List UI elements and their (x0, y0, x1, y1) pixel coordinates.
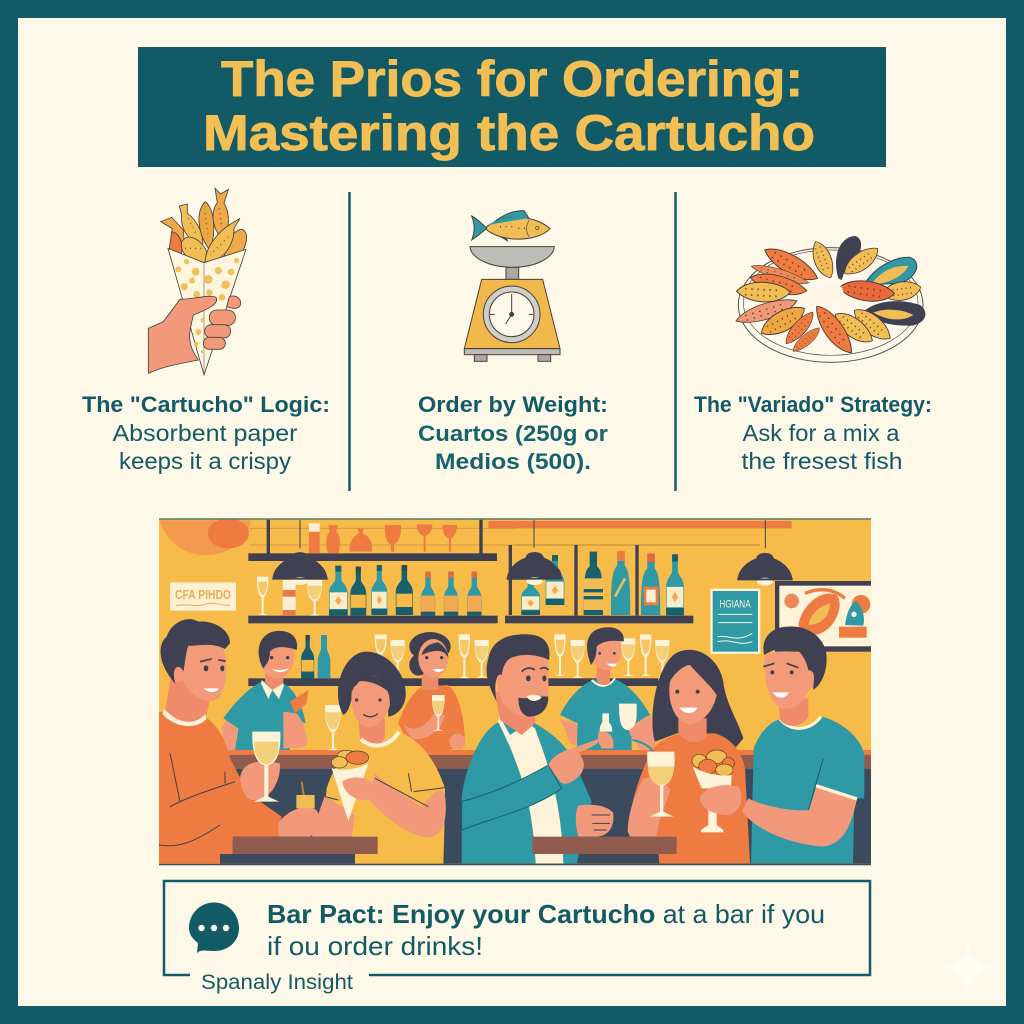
right man in teal t-shirt with cartucho (692, 627, 864, 863)
title banner (138, 47, 886, 167)
bar scene illustration (159, 518, 877, 865)
right table (532, 837, 677, 854)
framed seafood picture (775, 581, 871, 652)
background woman in orange (398, 632, 465, 750)
center man with teal jacket, pointing (462, 634, 613, 863)
callout: bar pact (164, 881, 870, 994)
callout: bar pact: if ou order drinks! (267, 931, 483, 961)
woman in orange with glass (628, 650, 750, 863)
wall sign (170, 582, 236, 611)
front woman with cartucho in yellow (312, 652, 446, 863)
front man in orange sweater (159, 619, 319, 863)
icon: hand holding paper cone of fried fish (148, 188, 247, 375)
title banner: Mastering the Cartucho (203, 105, 815, 161)
source label: Spanaly Insight (201, 971, 353, 994)
scene outline edges (159, 518, 871, 520)
body text: Absorbent paper (112, 420, 298, 446)
bartender in teal (560, 627, 655, 750)
panel: cartucho logic (82, 188, 330, 474)
callout text: Bar Pact: Enjoy your Cartucho at a bar if you (267, 899, 825, 929)
poster (710, 589, 760, 654)
title banner: The Prios for Ordering: (221, 51, 803, 107)
panel: cartucho logic: keeps it a crispy (119, 448, 292, 474)
panel: variado strategy: the fresest fish (742, 448, 902, 474)
poster: HGIANA (719, 599, 751, 611)
body text: Cuartos (250g or (418, 421, 608, 446)
right half of the bar scene (462, 519, 877, 865)
panel: order by weight (418, 211, 608, 474)
icon: sparkle watermark (944, 942, 992, 992)
heading: The "Cartucho" Logic: (82, 392, 330, 417)
panel: order by weight: Medios (500). (435, 449, 591, 474)
icon: speech bubble (189, 902, 239, 953)
left table (233, 837, 378, 854)
heading: Order by Weight: (418, 392, 608, 417)
panel: variado strategy (694, 236, 932, 474)
bar counter (515, 750, 871, 755)
column dividers (350, 192, 676, 491)
body text: Ask for a mix a (742, 420, 900, 446)
wall sign: CFA PIHDO (175, 587, 231, 602)
top shelf items (309, 523, 457, 553)
bar counter (228, 750, 515, 755)
left half of the bar scene (159, 518, 563, 864)
background man in teal (222, 631, 308, 750)
wine glass on bar (325, 705, 341, 750)
icon: plate of mixed fried fish and mussels (734, 236, 925, 362)
icon: fish on kitchen scale (464, 211, 560, 361)
heading: The "Variado" Strategy: (694, 392, 932, 417)
